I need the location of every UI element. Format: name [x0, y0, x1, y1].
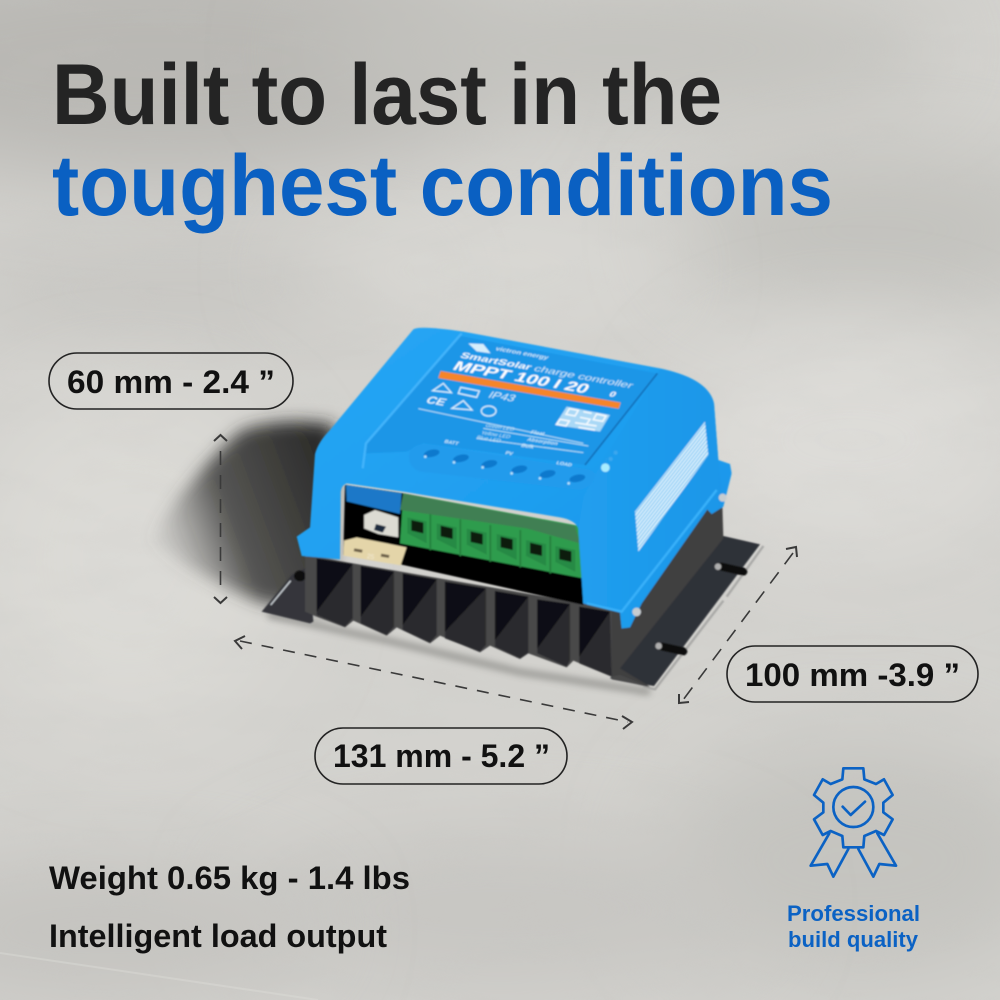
right mounting flange: [610, 536, 763, 689]
heatsink fin recesses: [317, 558, 612, 677]
left mounting flange: [262, 567, 313, 623]
spec: load output: Intelligent load output: [49, 918, 387, 954]
terminal screw holes: [423, 448, 586, 484]
LED legend: Blue LED: [475, 435, 502, 444]
QR code: [555, 407, 610, 432]
title: Built to last in the: [52, 47, 722, 143]
warning icon: [433, 383, 451, 393]
caption: professional build quality: Professional: [787, 901, 920, 926]
terminal labels: [443, 439, 573, 468]
LED legend: [475, 423, 560, 450]
black cavity: [343, 485, 583, 605]
certification icons: [452, 401, 496, 416]
product line text: SmartSolarcharge controller: [458, 351, 635, 390]
green terminal block: [400, 493, 583, 578]
label: height dimension: [49, 353, 293, 409]
enclosure screws: [632, 494, 727, 616]
heatsink: [305, 505, 723, 687]
label: width dimension: 100 mm -3.9 ”: [745, 657, 960, 693]
title: [52, 47, 833, 234]
terminal cover strip: [409, 439, 595, 490]
top label panel: 0: [607, 390, 618, 399]
icon: gear badge with ribbons: [811, 768, 896, 877]
model text: MPPT 100 I 20: [450, 358, 593, 396]
label: width dimension: [727, 646, 978, 702]
dimension arrow: length: [235, 636, 632, 729]
title: toughest conditions: [52, 138, 833, 234]
orange stripe: [438, 371, 621, 409]
terminal labels: BATT: [443, 439, 460, 447]
LED legend: Float: [529, 430, 546, 437]
caption: professional build quality: build quality: [788, 927, 919, 952]
LED legend: Green LED: [484, 423, 515, 433]
LED legend: Absorption: [526, 437, 560, 447]
device cast shadow: [150, 421, 650, 692]
product: solar charge controller: [262, 328, 763, 689]
top label panel: [363, 333, 657, 468]
terminal labels: LOAD: [555, 461, 573, 468]
LED legend: Yellow LED: [480, 431, 511, 440]
caption: professional build quality: [787, 901, 920, 952]
status LED: [601, 451, 618, 472]
terminal marker dots: [424, 455, 570, 485]
fuse: 25: [366, 553, 375, 561]
terminal sockets: [407, 517, 575, 572]
manual icon: [458, 387, 479, 397]
Victron logo: [468, 343, 491, 353]
white connector clip: [364, 510, 398, 537]
fuse: [343, 537, 407, 565]
CE mark: CE: [423, 394, 449, 408]
label: length dimension: [315, 728, 567, 784]
enclosure side face: [578, 369, 723, 628]
brand text: victron energy: [494, 346, 550, 361]
label: height dimension: 60 mm - 2.4 ”: [67, 364, 275, 400]
dimension arrow: width: [679, 547, 797, 703]
blue enclosure shell: [297, 328, 732, 628]
rating text: IP43: [486, 390, 519, 404]
divider lines: [418, 409, 588, 453]
LED legend: Bulk: [520, 443, 536, 450]
terminal labels: PV: [504, 451, 514, 457]
dimension arrow: height: [214, 435, 227, 603]
label: length dimension: 131 mm - 5.2 ”: [333, 738, 550, 774]
blue interior wall: [346, 485, 402, 514]
side label: [635, 422, 708, 552]
spec: weight: Weight 0.65 kg - 1.4 lbs: [49, 860, 410, 896]
